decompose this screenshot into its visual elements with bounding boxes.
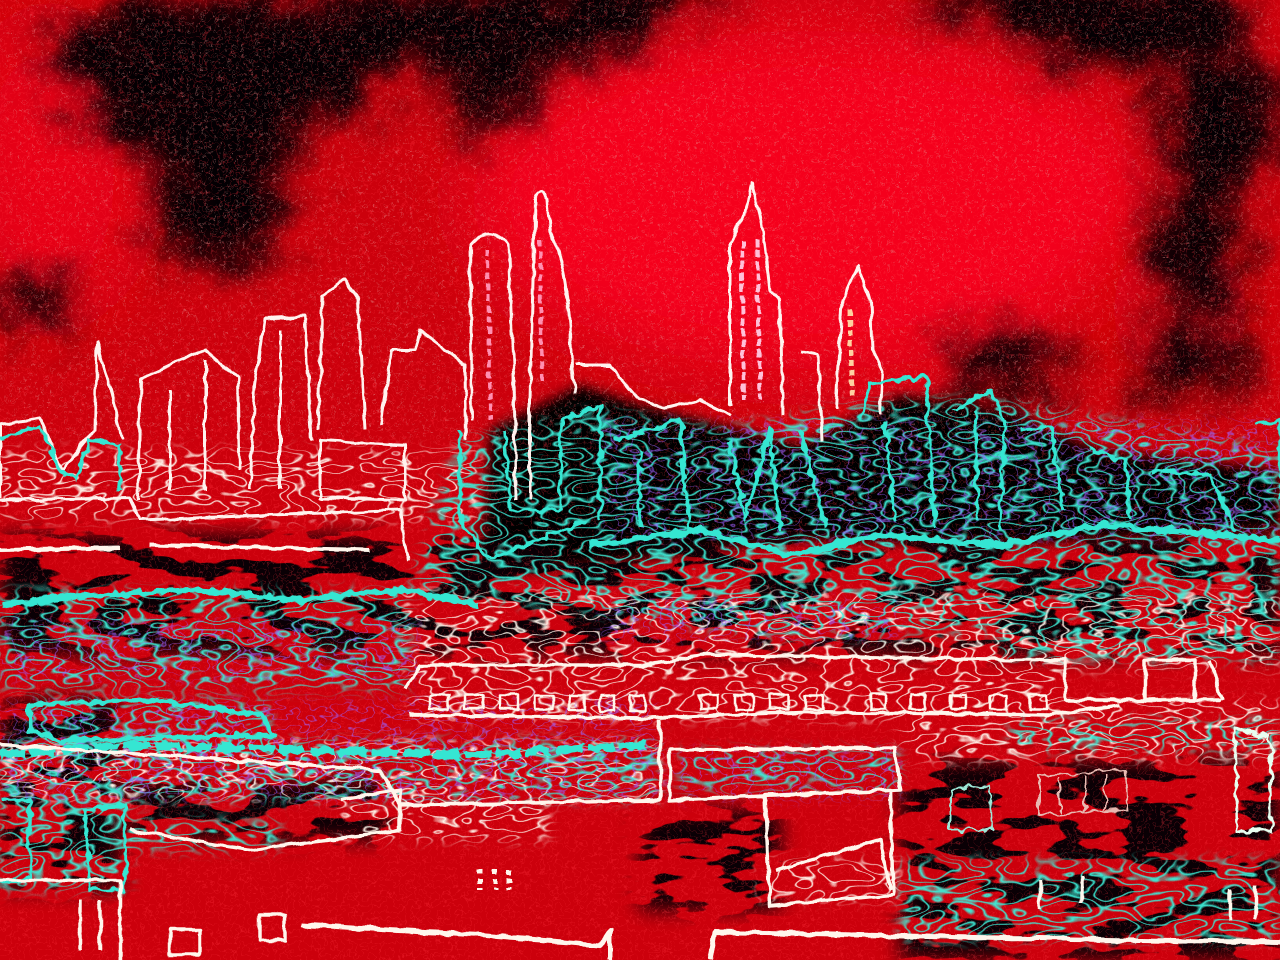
lower city: white contour outlines [0,440,1280,910]
towers: left skyline group [0,280,822,560]
lower city: dark blotches among red blocks [0,518,1280,960]
city: cyan contour outlines [0,390,1280,950]
skyline: white tower outlines [0,182,882,560]
skyline: cyan outlines of mid-rise buildings [0,375,1280,890]
lower city: white building outlines [0,545,1280,960]
city: dark building masses [480,385,1280,575]
detail: violet window specks [0,410,1280,809]
tower: twin spire left of centre [470,191,575,500]
tower: smaller right spire [836,266,882,415]
tower: tall central spire [730,182,783,415]
sky: bright red and dark cloud masses [0,0,1280,400]
